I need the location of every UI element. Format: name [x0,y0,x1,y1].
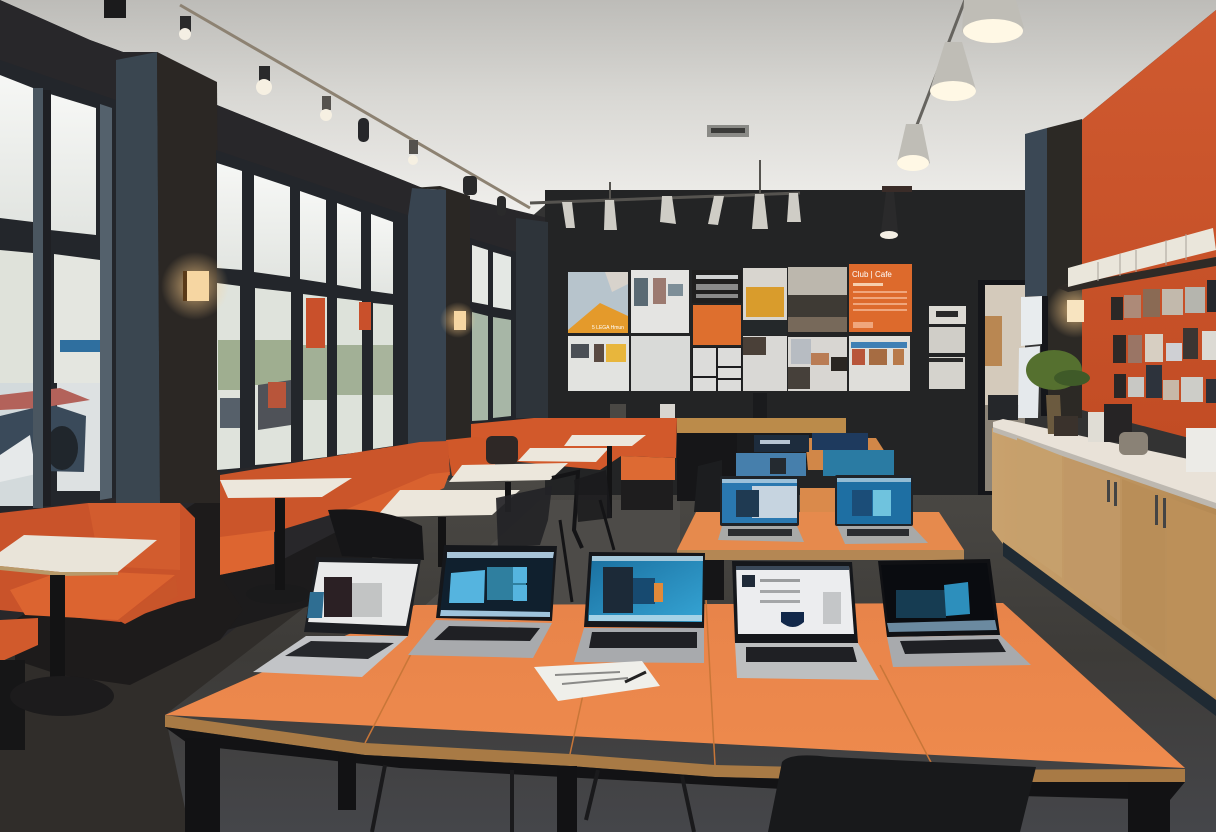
back laptops [736,433,894,476]
table legs [185,738,1170,832]
laptop: front 5 [878,559,1031,667]
window: left [0,60,116,512]
papers on table [534,661,660,701]
small table behind laptops [800,438,885,512]
ceiling track lights: left [104,0,530,216]
wall booth seating: left [220,441,450,632]
poster: landscape sweep [568,272,628,333]
orange wall [1082,10,1216,445]
laptop: front 2 [408,545,557,658]
poster: orange text notice [849,264,912,332]
front table [165,600,1185,800]
left wall [0,0,548,640]
items on back counter [610,393,767,418]
counter [992,419,1216,716]
pillar: left [116,52,220,503]
framed photos: wall grid [1111,280,1216,403]
kiosk panel [1018,296,1042,418]
laptop: middle right [835,475,928,544]
posters [568,264,966,391]
doorway [978,280,1025,495]
wall section right of window [516,218,548,418]
poster: landscape sweep: 5 LEGA Hmun [592,325,624,331]
right wall lamp [1067,300,1084,322]
window: centre-left [216,150,410,472]
window: right [470,238,516,424]
chairs [328,460,722,602]
pendant lamps: right [897,0,1024,171]
wall lamps [161,252,476,338]
laptop: front 3 [574,552,705,663]
back wall [545,190,1025,495]
side tables [0,435,646,716]
back counter [677,418,847,501]
foreground chair [768,755,1036,832]
booth: front left [0,503,243,750]
pillar: centre [408,186,470,445]
shelf with cards [1056,228,1216,292]
laptop: front 1 [253,557,421,677]
poster: orange text notice: Club | Cafe [852,270,892,279]
wall booth seating: back [446,418,677,510]
plant and counter items [1026,350,1216,472]
middle table [677,512,964,600]
ceiling track lights: back [530,125,912,239]
laptop: middle left [718,476,804,542]
floor [0,480,1216,832]
laptop: front 4 [732,561,879,680]
right pillar [1025,119,1103,418]
ceiling [0,0,1216,218]
